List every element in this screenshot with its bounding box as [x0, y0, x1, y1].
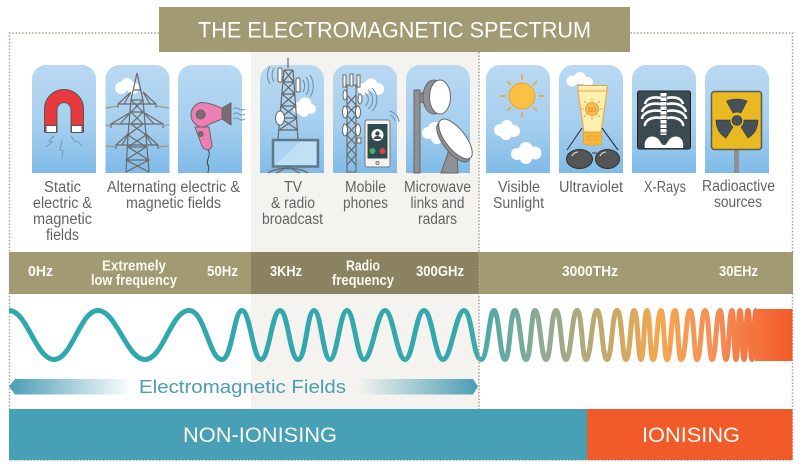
label: magnetic: [33, 211, 92, 228]
frequency labels: 3KHz: [270, 264, 302, 280]
label: alternating electric and magnetic fields: [107, 179, 241, 212]
card: visible sunlight: [486, 65, 550, 212]
icon: clouds: [494, 120, 542, 164]
label: X-Rays: [644, 179, 686, 196]
icon: cloud: [358, 78, 384, 95]
label: [493, 179, 545, 212]
icon: radiation sign: [712, 92, 762, 173]
label: alternating electric and magnetic fields: Alternating electric &: [107, 179, 241, 196]
label: Mobile: [345, 179, 386, 196]
card: mobile phones: [333, 65, 399, 212]
panel: radio frequency background: [251, 52, 479, 409]
card: static fields magnet: [32, 65, 96, 244]
label: electric &: [33, 195, 93, 212]
icon: broadcast tower: [268, 58, 308, 173]
frequency labels: low frequency: [91, 273, 177, 289]
icon: cloud: [422, 122, 443, 144]
card: x-rays: [632, 65, 696, 196]
label: radars: [418, 211, 457, 228]
card: microwave links and radars: [404, 65, 478, 228]
label: & radio: [271, 195, 315, 212]
label: Microwave: [404, 179, 471, 196]
label: broadcast: [262, 211, 324, 228]
frequency labels: Radio: [346, 258, 380, 274]
label: sources: [714, 194, 762, 211]
frequency labels: 3000THz: [562, 264, 618, 280]
label: [404, 179, 471, 228]
label: Static: [44, 179, 81, 196]
ionising bar: IONISING: [642, 424, 740, 447]
electromagnetic fields arrow: Electromagnetic Fields: [139, 376, 346, 397]
ionising bar: [587, 409, 792, 460]
wave: [9, 309, 792, 361]
icon: phone mast: [344, 85, 359, 172]
icon: television: [273, 140, 318, 166]
label: Visible: [498, 179, 540, 196]
icon: sun: [500, 74, 544, 117]
label: Sunlight: [493, 195, 545, 212]
title banner: [159, 7, 630, 52]
icon: hair dryer: [191, 102, 245, 173]
label: [33, 179, 93, 244]
non-ionising bar: [9, 409, 587, 460]
label: Ultraviolet: [559, 179, 624, 196]
icon: smartphone: [365, 120, 390, 167]
card: ultraviolet: [559, 65, 624, 196]
frequency band: [9, 252, 793, 294]
electromagnetic fields arrow: [9, 376, 478, 397]
icon: sunscreen tube: 50: [588, 105, 596, 114]
frequency labels: 0Hz: [28, 264, 53, 280]
title banner: THE ELECTROMAGNETIC SPECTRUM: [198, 18, 591, 42]
label: links and: [410, 195, 464, 212]
icon: x-ray film: [638, 91, 690, 149]
divider: radio to optical: [478, 52, 480, 409]
label: Radioactive: [702, 178, 775, 195]
icon: cloud: [566, 72, 593, 87]
frequency labels: Extremely: [102, 258, 166, 274]
card: hair dryer: [178, 65, 245, 173]
icon: sunglasses: [566, 128, 620, 168]
label: fields: [46, 227, 79, 244]
card: alternating fields pylon: [106, 65, 170, 173]
icon: cloud: [293, 98, 316, 117]
card: TV and radio broadcast: [260, 58, 324, 228]
non-ionising bar: NON-IONISING: [183, 424, 337, 447]
label: alternating electric and magnetic fields: magnetic fields: [126, 195, 221, 212]
frequency labels: 30EHz: [719, 264, 758, 280]
label: [262, 179, 324, 228]
label: phones: [343, 195, 388, 212]
frequency labels: 50Hz: [207, 264, 238, 280]
frequency labels: frequency: [332, 273, 394, 289]
icon: horseshoe magnet: [44, 90, 84, 159]
icon: cloud: [115, 78, 139, 94]
icon: pylon: [106, 73, 169, 172]
frequency labels: 300GHz: [416, 264, 464, 280]
label: TV: [284, 179, 303, 196]
label: [702, 178, 775, 211]
frequency labels: [28, 258, 758, 289]
icon: microwave dishes: [414, 80, 478, 173]
label: [343, 179, 388, 212]
card: radioactive sources: [702, 65, 775, 211]
